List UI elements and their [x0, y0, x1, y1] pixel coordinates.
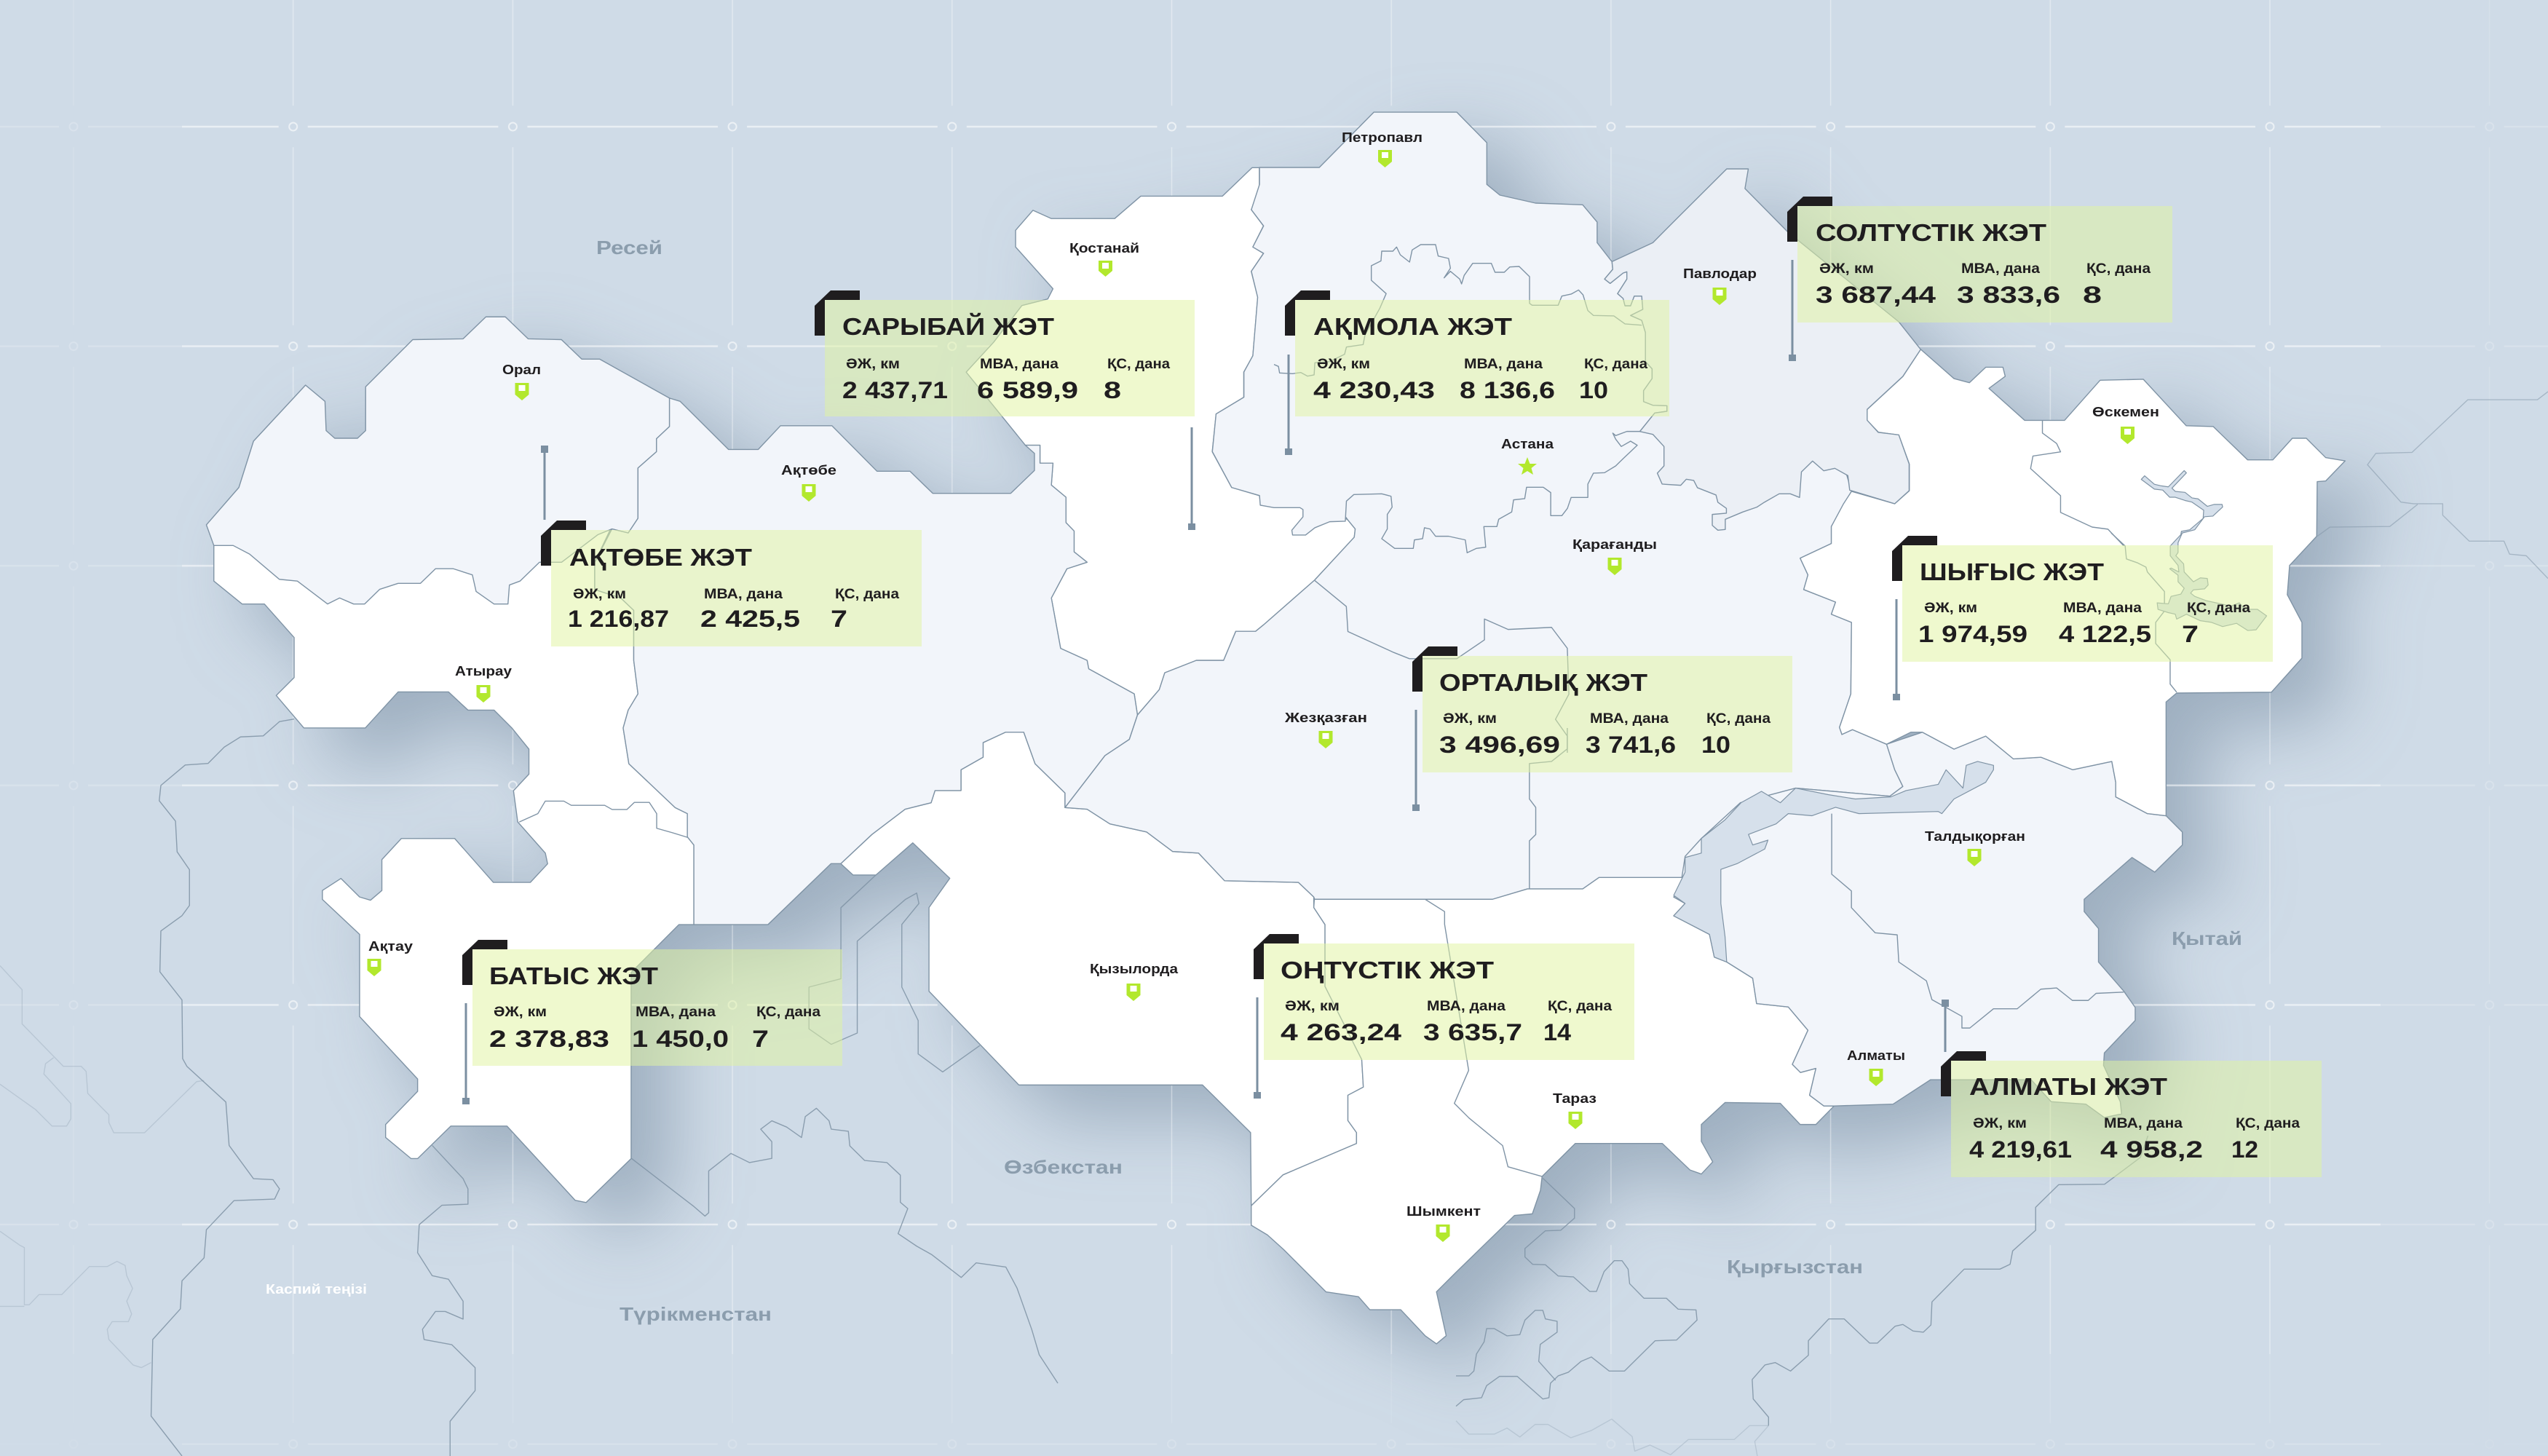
column labels: ҚС, дана	[1584, 357, 1647, 372]
city: Жезқазған	[1284, 711, 1367, 748]
column labels: ҚС, дана	[756, 1005, 820, 1020]
callout: САРЫБАЙ ЖЭТ	[815, 290, 1195, 530]
column labels: ӘЖ, км	[573, 587, 626, 602]
leader line	[1254, 997, 1261, 1099]
region: Aktobe	[595, 398, 1137, 925]
city: Атырау: Атырау	[455, 664, 512, 678]
capital: Астана with star: Астана	[1501, 437, 1554, 451]
heading: ОРТАЛЫҚ ЖЭТ	[1439, 669, 1647, 696]
values: 12	[2231, 1136, 2258, 1163]
column labels	[1819, 261, 2151, 277]
lake Zaysan and Irtysh river	[2141, 470, 2267, 630]
callout: ОРТАЛЫҚ ЖЭТ	[1412, 646, 1792, 811]
values: 1 216,87	[568, 606, 669, 632]
city: Шымкент	[1406, 1204, 1481, 1242]
values: 7	[831, 606, 847, 632]
column labels: ҚС, дана	[1107, 357, 1170, 372]
values: 8	[2083, 282, 2102, 308]
heading: АҚМОЛА ЖЭТ	[1313, 313, 1512, 340]
heading: САРЫБАЙ ЖЭТ	[842, 312, 1054, 340]
column labels: ҚС, дана	[1548, 999, 1612, 1014]
leader line	[1412, 710, 1420, 811]
region: Zhambyl and Turkistan	[1251, 877, 1834, 1344]
panel	[551, 530, 922, 646]
city: Алматы: Алматы	[1847, 1048, 1905, 1063]
bracket	[1941, 1051, 1986, 1096]
bracket	[1787, 197, 1832, 242]
values: 2 425,5	[700, 606, 800, 632]
values: 1 450,0	[632, 1026, 729, 1052]
country label: Өзбекстан: Өзбекстан	[1004, 1156, 1123, 1178]
city: Қарағанды	[1572, 537, 1657, 575]
callout: ОҢТҮСТІК ЖЭТ	[1254, 934, 1634, 1099]
heading: БАТЫС ЖЭТ	[489, 962, 658, 989]
panel	[1951, 1061, 2322, 1177]
column labels: МВА, дана	[1427, 999, 1506, 1014]
column labels	[846, 357, 1170, 372]
heading: АЛМАТЫ ЖЭТ	[1969, 1073, 2167, 1100]
heading: АҚТӨБЕ ЖЭТ	[569, 544, 752, 571]
region: Almaty and Zhetisu	[1674, 732, 2183, 1117]
city: Орал: Орал	[502, 363, 541, 377]
region: Oral	[206, 317, 670, 604]
values	[1816, 282, 2102, 308]
bracket	[1892, 536, 1937, 581]
column labels: МВА, дана	[980, 357, 1059, 372]
column labels	[1285, 999, 1612, 1014]
region: Akmola and North Kazakhstan	[1212, 112, 1667, 553]
city: Ақтөбе: Ақтөбе	[781, 463, 836, 478]
column labels: МВА, дана	[704, 587, 783, 602]
column labels: ҚС, дана	[1706, 711, 1770, 727]
city: Ақтөбе	[781, 463, 836, 502]
column labels: ӘЖ, км	[1819, 261, 1874, 277]
heading: ОҢТҮСТІК ЖЭТ	[1281, 957, 1494, 984]
values	[1918, 621, 2199, 647]
column labels	[1443, 711, 1770, 727]
map of Kazakhstan regions	[206, 112, 2345, 1344]
column labels: ҚС, дана	[2086, 261, 2151, 277]
city: Алматы	[1847, 1048, 1905, 1086]
callout: БАТЫС ЖЭТ	[462, 940, 842, 1104]
values: 6 589,9	[977, 377, 1078, 403]
region: East Kazakhstan	[1800, 349, 2345, 816]
panel	[1797, 206, 2172, 323]
column labels: ӘЖ, км	[1317, 357, 1370, 372]
column labels: МВА, дана	[636, 1005, 716, 1020]
city: Павлодар: Павлодар	[1683, 266, 1757, 281]
values: 2 437,71	[842, 377, 948, 403]
city: Тараз: Тараз	[1553, 1091, 1597, 1106]
panel	[1423, 656, 1792, 772]
values	[489, 1026, 769, 1052]
values: 1 974,59	[1918, 621, 2027, 647]
values: 7	[2182, 621, 2199, 647]
country label: Қырғызстан: Қырғызстан	[1727, 1256, 1863, 1278]
column labels: МВА, дана	[1961, 261, 2040, 277]
bracket	[815, 290, 860, 336]
leader line	[462, 1003, 470, 1104]
city: Қызылорда: Қызылорда	[1090, 962, 1179, 976]
capital: Астана with star	[1501, 437, 1554, 475]
city: Шымкент: Шымкент	[1406, 1204, 1481, 1219]
values	[842, 377, 1121, 403]
city: Атырау	[455, 664, 512, 703]
values: 4 122,5	[2059, 621, 2151, 647]
city: Тараз	[1553, 1091, 1597, 1129]
city: Петропавл: Петропавл	[1342, 130, 1423, 145]
column labels: ӘЖ, км	[1924, 601, 1977, 616]
values: 8 136,6	[1460, 377, 1555, 403]
bracket	[462, 940, 507, 985]
bracket	[541, 521, 586, 566]
city: Павлодар	[1683, 266, 1757, 305]
callout: СОЛТҮСТІК ЖЭТ	[1787, 197, 2172, 361]
values: 4 263,24	[1281, 1019, 1401, 1045]
column labels	[573, 587, 899, 602]
column labels: ҚС, дана	[2187, 601, 2250, 616]
leader line	[1893, 599, 1900, 700]
column labels: ӘЖ, км	[1973, 1116, 2027, 1131]
values: 14	[1543, 1019, 1571, 1045]
leader line	[1789, 260, 1796, 361]
city: Өскемен: Өскемен	[2092, 405, 2159, 419]
region: Atyrau and Mangystau	[214, 528, 694, 1203]
city: Талдықорған: Талдықорған	[1925, 829, 2025, 844]
leader line	[1285, 355, 1292, 455]
country label: Ресей: Ресей	[596, 237, 662, 258]
values: 3 741,6	[1586, 732, 1676, 758]
column labels: МВА, дана	[1464, 357, 1543, 372]
values	[1439, 732, 1730, 758]
heading: ШЫҒЫС ЖЭТ	[1920, 558, 2104, 585]
city: Қостанай	[1069, 241, 1139, 277]
column labels: ҚС, дана	[2236, 1116, 2300, 1131]
panel	[1264, 943, 1634, 1060]
column labels: ӘЖ, км	[846, 357, 900, 372]
heading: СОЛТҮСТІК ЖЭТ	[1816, 219, 2046, 246]
map drop shadow	[206, 112, 2345, 1344]
region: Kyzylorda	[841, 732, 1364, 1206]
bracket	[1254, 934, 1299, 979]
panel	[1295, 300, 1669, 416]
country label: Қытай: Қытай	[2172, 927, 2242, 949]
city: Қызылорда	[1090, 962, 1179, 1001]
column labels	[1973, 1116, 2300, 1131]
column labels: МВА, дана	[1590, 711, 1669, 727]
column labels	[1317, 357, 1647, 372]
panel	[825, 300, 1195, 416]
values: 3 635,7	[1423, 1019, 1522, 1045]
callout: АҚТӨБЕ ЖЭТ	[541, 446, 922, 646]
city: Орал	[502, 363, 541, 400]
values: 7	[752, 1026, 769, 1052]
values: 3 833,6	[1957, 282, 2060, 308]
callout: ШЫҒЫС ЖЭТ	[1892, 536, 2273, 700]
lake Balkhash	[1674, 761, 1993, 962]
city: Жезқазған: Жезқазған	[1284, 711, 1367, 725]
column labels: МВА, дана	[2104, 1116, 2183, 1131]
panel	[472, 949, 842, 1066]
values: 2 378,83	[489, 1026, 609, 1052]
city: Қостанай: Қостанай	[1069, 241, 1139, 256]
callout: АҚМОЛА ЖЭТ	[1285, 290, 1669, 455]
column labels	[494, 1005, 820, 1020]
region: Pavlodar	[1605, 169, 1920, 530]
values	[1281, 1019, 1571, 1045]
values: 8	[1104, 377, 1121, 403]
values: 3 496,69	[1439, 732, 1560, 758]
values: 10	[1579, 377, 1608, 403]
city: Петропавл	[1342, 130, 1423, 167]
column labels: ӘЖ, км	[494, 1005, 547, 1020]
city: Өскемен	[2092, 405, 2159, 444]
values	[568, 606, 847, 632]
neighbouring country borders	[0, 392, 2548, 1456]
callout: АЛМАТЫ ЖЭТ	[1941, 1000, 2322, 1177]
values: 4 230,43	[1313, 377, 1435, 403]
region: Karaganda and Ulytau	[1065, 406, 1903, 899]
region: Kostanay	[966, 167, 1356, 715]
column labels	[1924, 601, 2250, 616]
city: Ақтау	[367, 939, 413, 976]
values: 10	[1701, 732, 1730, 758]
values	[1969, 1136, 2258, 1163]
column labels: ӘЖ, км	[1285, 999, 1340, 1014]
sea label: Каспий теңізі: Каспий теңізі	[266, 1282, 367, 1297]
column labels: ӘЖ, км	[1443, 711, 1497, 727]
values: 3 687,44	[1816, 282, 1936, 308]
values: 4 219,61	[1969, 1136, 2072, 1163]
country label: Түрікменстан: Түрікменстан	[620, 1303, 772, 1325]
column labels: ҚС, дана	[835, 587, 899, 602]
internal region boundaries	[519, 245, 2177, 1176]
leader line	[1942, 1000, 1949, 1052]
city: Талдықорған	[1925, 829, 2025, 866]
column labels: МВА, дана	[2063, 601, 2142, 616]
leader line	[541, 446, 548, 520]
panel	[1902, 545, 2273, 662]
bracket	[1285, 290, 1330, 336]
city: Ақтау: Ақтау	[368, 939, 413, 954]
city: Қарағанды: Қарағанды	[1572, 537, 1657, 552]
bracket	[1412, 646, 1457, 692]
leader line	[1188, 427, 1195, 530]
values	[1313, 377, 1608, 403]
values: 4 958,2	[2100, 1136, 2203, 1163]
